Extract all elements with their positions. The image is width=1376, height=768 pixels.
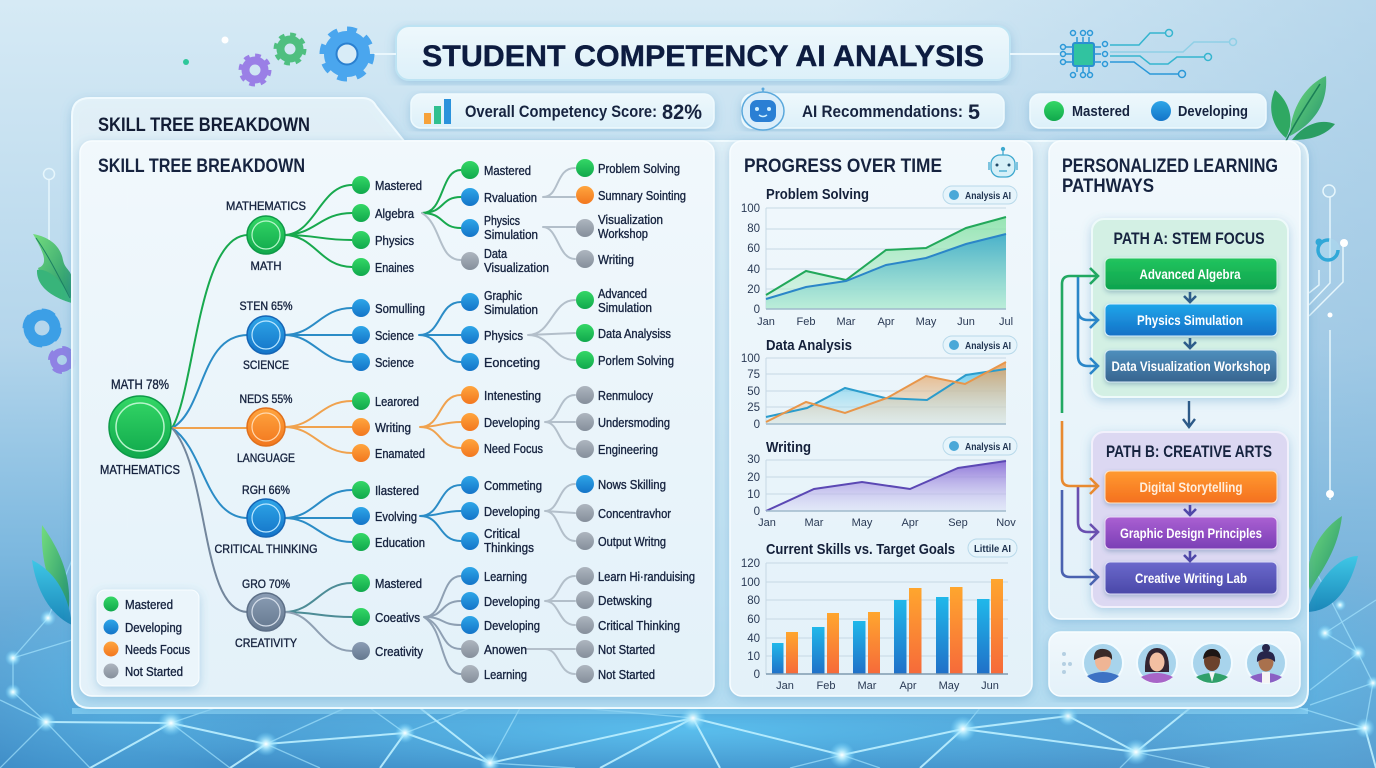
level 2 skills: Mastered <box>375 576 422 591</box>
status legend <box>97 590 199 686</box>
chart: problem solving: Problem Solving <box>766 186 869 203</box>
level 2 skills: Science <box>375 328 414 343</box>
level 3 skills: Developing <box>484 415 540 430</box>
badge: analysis AI: Analysis AI <box>965 442 1011 453</box>
legend pill <box>1030 94 1266 128</box>
chart: current skills vs target goals: 10 <box>747 651 760 663</box>
chart: problem solving: 100 <box>741 203 760 215</box>
decorative right circuit lines <box>1309 185 1343 500</box>
level 4 skills: Renmulocy <box>598 388 653 403</box>
background network <box>0 560 1376 768</box>
branch node: critical thinking <box>214 483 318 556</box>
heading: skill tree: SKILL TREE BREAKDOWN <box>98 156 305 177</box>
step: physics simulation: Physics Simulation <box>1137 312 1243 328</box>
chart: problem solving: Jul <box>999 316 1013 328</box>
root node: mathematics: MATHEMATICS <box>100 462 180 477</box>
icon: robot <box>742 88 784 130</box>
step: advanced algebra: Advanced Algebra <box>1140 266 1241 282</box>
chart: problem solving: 0 <box>754 304 760 316</box>
level 4 skills: Problem Solving <box>598 161 680 176</box>
chart: writing: Apr <box>901 517 919 529</box>
branch node: science: SCIENCE <box>243 358 289 372</box>
root node: mathematics <box>100 377 180 477</box>
level 3 skills: Developing <box>484 618 540 633</box>
chart: writing: Sep <box>948 517 968 529</box>
chart: current skills vs target goals: Jan <box>776 680 794 692</box>
branch node: creativity: CREATIVITY <box>235 636 297 650</box>
branch node: math: MATHEMATICS <box>226 199 306 213</box>
avatar 1 <box>1083 643 1123 683</box>
path A: STEM focus <box>1092 219 1288 397</box>
chart: problem solving: Jun <box>957 316 975 328</box>
level 2 skills: Evolving <box>375 509 417 524</box>
chart: problem solving: 80 <box>747 223 760 235</box>
side routing arrows <box>1062 268 1098 585</box>
chart: current skills vs target goals: 40 <box>747 633 760 645</box>
chart: problem solving: 40 <box>747 264 760 276</box>
level 3 skills: Graphic <box>484 288 522 303</box>
chart: data analysis: 50 <box>747 386 760 398</box>
branch node: language <box>237 392 295 465</box>
chart: writing: 0 <box>754 506 760 518</box>
chart: current skills vs target goals: May <box>939 680 960 692</box>
icon: lower right leaves <box>1306 516 1358 612</box>
level 4 skills: Not Started <box>598 667 655 682</box>
level 2 skills: Algebra <box>375 206 415 221</box>
heading: progress: PROGRESS OVER TIME <box>744 156 942 177</box>
chart: current skills vs target goals: 0 <box>754 669 760 681</box>
heading: pathways: PERSONALIZED LEARNING <box>1062 156 1278 177</box>
stat: overall competency score: 82% <box>662 101 702 124</box>
branch node: creativity: GRO 70% <box>242 577 290 591</box>
level 3 skills: Data <box>484 246 508 261</box>
chart: data analysis: 100 <box>741 353 760 365</box>
arrows between B steps <box>1184 505 1196 561</box>
badge: analysis AI <box>943 437 1017 455</box>
chart: problem solving: Mar <box>837 316 856 328</box>
branch node: math <box>226 199 306 273</box>
icon: left leaf <box>33 234 72 303</box>
chart: data analysis: 25 <box>747 402 760 414</box>
level 3 skills: Simulation <box>484 302 538 317</box>
level 2 skills: Science <box>375 355 414 370</box>
chart: writing: Mar <box>805 517 824 529</box>
icon: left purple gear <box>50 348 74 372</box>
level 4 skills: Sumnary Sointing <box>598 188 686 203</box>
icon: top plant <box>1271 76 1335 141</box>
step: advanced algebra <box>1105 258 1277 290</box>
branch node: language: NEDS 55% <box>240 392 293 406</box>
icon: bar chart <box>424 99 451 124</box>
badge: analysis AI <box>943 186 1017 204</box>
step: creative writing lab <box>1105 562 1277 594</box>
level 3 skills: Thinkings <box>484 540 534 555</box>
legend pill: Developing <box>1178 103 1248 120</box>
chart: data analysis: 75 <box>747 369 760 381</box>
step: data visualization workshop <box>1105 350 1277 382</box>
step: graphic design principles <box>1105 517 1277 549</box>
panel: personalized learning pathways <box>1049 141 1300 619</box>
stat: overall competency score: Overall Competency Score: <box>465 102 657 121</box>
chart: writing: May <box>852 517 873 529</box>
step: creative writing lab: Creative Writing Lab <box>1135 570 1247 586</box>
branch node: critical thinking: RGH 66% <box>242 483 290 497</box>
chart: data analysis <box>741 336 1017 431</box>
status legend: Not Started <box>125 664 183 679</box>
badge: analysis AI: Analysis AI <box>965 191 1011 202</box>
chart: current skills vs target goals: Current Skills vs. Target Goals <box>766 541 955 558</box>
decorative dots <box>1062 652 1072 674</box>
path B: creative arts: PATH B: CREATIVE ARTS <box>1106 442 1272 461</box>
level 3 skills <box>461 161 549 683</box>
level 3 skills: Need Focus <box>484 441 543 456</box>
step: data visualization workshop: Data Visualization Workshop <box>1112 358 1270 374</box>
level 2 skills <box>352 176 425 660</box>
path A: STEM focus: PATH A: STEM FOCUS <box>1114 229 1264 248</box>
level 3 skills: Mastered <box>484 163 531 178</box>
level 3 skills: Physics <box>484 213 520 228</box>
chart: problem solving: Apr <box>877 316 895 328</box>
panel: student avatars <box>1049 632 1300 696</box>
chart: data analysis: 0 <box>754 419 760 431</box>
level 4 skills: Nows Skilling <box>598 477 666 492</box>
chart: current skills vs target goals: 120 <box>741 558 760 570</box>
chart: writing: Nov <box>996 517 1016 529</box>
stat: AI recommendations <box>742 88 1004 130</box>
level 3 skills: Learning <box>484 569 527 584</box>
level 2 skills: Physics <box>375 233 414 248</box>
chart: problem solving <box>741 186 1017 328</box>
badge: little AI: Littile AI <box>974 544 1011 555</box>
avatar 3 <box>1192 643 1232 683</box>
title banner <box>396 26 1010 80</box>
level 3 skills: Physics <box>484 328 523 343</box>
panel: progress over time <box>730 141 1032 696</box>
chart: problem solving: Jan <box>757 316 775 328</box>
level 3 skills: Learning <box>484 667 527 682</box>
level 3 skills: Simulation <box>484 227 538 242</box>
chart: current skills vs target goals <box>741 539 1017 692</box>
panel: skill tree <box>80 141 714 696</box>
level 3 skills: Visualization <box>484 260 549 275</box>
step: graphic design principles: Graphic Design Principles <box>1120 525 1262 541</box>
level 4 skills: Workshop <box>598 226 648 241</box>
level 2 skills: Education <box>375 535 425 550</box>
icon: robot outline <box>989 148 1017 177</box>
icon: left blue gear <box>25 311 59 345</box>
level 2 skills: Enamated <box>375 446 425 461</box>
level 4 skills: Learn Hi·randuising <box>598 569 695 584</box>
step: digital storytelling: Digital Storytelling <box>1140 479 1242 495</box>
avatar 4 <box>1246 643 1286 683</box>
branch node: critical thinking: CRITICAL THINKING <box>214 542 318 556</box>
chart: problem solving: 20 <box>747 284 760 296</box>
level 4 skills: Concentravhor <box>598 506 672 521</box>
level 4 skills: Simulation <box>598 300 652 315</box>
chart: current skills vs target goals: Feb <box>817 680 835 692</box>
chart: problem solving: 60 <box>747 243 760 255</box>
level 3 skills: Developing <box>484 594 540 609</box>
branch node: science <box>240 299 293 372</box>
arrow: path A to path B <box>1183 401 1195 427</box>
level 4 skills: Output Writng <box>598 534 666 549</box>
level 4 skills: Advanced <box>598 286 647 301</box>
branch node: creativity <box>235 577 297 650</box>
level 2 skills: Mastered <box>375 178 422 193</box>
level 4 skills: Detwsking <box>598 593 652 608</box>
level 2 skills: Somulling <box>375 301 425 316</box>
level 4 skills: Writing <box>598 252 634 267</box>
level 3 skills: Anowen <box>484 642 527 657</box>
level 2 skills: Coeativs <box>375 610 420 625</box>
level 2 skills: Writing <box>375 420 411 435</box>
icon: green gear <box>276 34 304 64</box>
chart: problem solving: May <box>916 316 937 328</box>
level 3 skills: Critical <box>484 526 520 541</box>
chart: current skills vs target goals: 100 <box>741 577 760 589</box>
level 4 skills: Engineering <box>598 442 658 457</box>
legend pill: Mastered <box>1072 103 1130 120</box>
level 3 skills: Commeting <box>484 478 542 493</box>
chart: data analysis: Data Analysis <box>766 337 852 354</box>
branch node: math: MATH <box>250 259 282 273</box>
icon: spinner <box>1316 238 1348 262</box>
avatar 2 <box>1137 643 1177 683</box>
status legend: Mastered <box>125 597 173 612</box>
level 4 skills: Porlem Solving <box>598 353 674 368</box>
chart: current skills vs target goals: Apr <box>899 680 917 692</box>
arrows between A steps <box>1184 292 1196 348</box>
chart: current skills vs target goals: 60 <box>747 614 760 626</box>
icon: blue gear <box>322 30 396 78</box>
icon: circuit chip <box>1010 30 1236 78</box>
branch node: science: STEN 65% <box>240 299 293 313</box>
root node: mathematics: MATH 78% <box>111 377 169 392</box>
decorative dots <box>183 36 228 65</box>
level 2 skills: Enaines <box>375 260 414 275</box>
step: physics simulation <box>1105 304 1277 336</box>
title banner: STUDENT COMPETENCY AI ANALYSIS <box>422 40 984 73</box>
badge: analysis AI <box>943 336 1017 354</box>
step: digital storytelling <box>1105 471 1277 503</box>
level 2 skills: Learored <box>375 394 419 409</box>
heading: pathways <box>1062 156 1278 197</box>
status legend: Needs Focus <box>125 642 190 657</box>
tree connectors <box>172 168 575 674</box>
level 2 skills: Creativity <box>375 644 423 659</box>
level 3 skills: Developing <box>484 504 540 519</box>
stat: AI recommendations: 5 <box>968 101 980 124</box>
level 2 skills: Ilastered <box>375 483 419 498</box>
path B: creative arts <box>1092 432 1288 607</box>
decorative left circuit line <box>44 168 54 240</box>
branch node: language: LANGUAGE <box>237 451 295 465</box>
chart: current skills vs target goals: Jun <box>981 680 999 692</box>
outer glass panel with tab <box>72 98 1308 708</box>
chart: current skills vs target goals: 80 <box>747 595 760 607</box>
level 4 skills: Undersmoding <box>598 415 670 430</box>
level 4 skills: Visualization <box>598 212 663 227</box>
icon: lower left leaves <box>32 525 72 625</box>
stat: overall competency score <box>411 94 714 128</box>
level 4 skills: Critical Thinking <box>598 618 680 633</box>
badge: analysis AI: Analysis AI <box>965 341 1011 352</box>
chart: current skills vs target goals: Mar <box>858 680 877 692</box>
chart: writing: 10 <box>747 489 760 501</box>
level 3 skills: Intenesting <box>484 388 541 403</box>
chart: writing: Jan <box>758 517 776 529</box>
chart: writing: Writing <box>766 439 811 456</box>
icon: purple gear <box>240 56 270 84</box>
stat: AI recommendations: AI Recommendations: <box>802 102 963 121</box>
level 3 skills: Rvaluation <box>484 190 537 205</box>
level 3 skills: Eonceting <box>484 355 540 370</box>
tab heading: SKILL TREE BREAKDOWN <box>98 115 310 136</box>
level 4 skills <box>576 159 695 683</box>
chart: writing <box>747 437 1017 529</box>
chart: writing: 30 <box>747 454 760 466</box>
level 4 skills: Not Started <box>598 642 655 657</box>
level 4 skills: Data Analysiss <box>598 326 671 341</box>
chart: writing: 20 <box>747 472 760 484</box>
badge: little AI <box>968 539 1017 557</box>
chart: problem solving: Feb <box>797 316 815 328</box>
heading: pathways: PATHWAYS <box>1062 176 1154 197</box>
status legend: Developing <box>125 620 182 635</box>
